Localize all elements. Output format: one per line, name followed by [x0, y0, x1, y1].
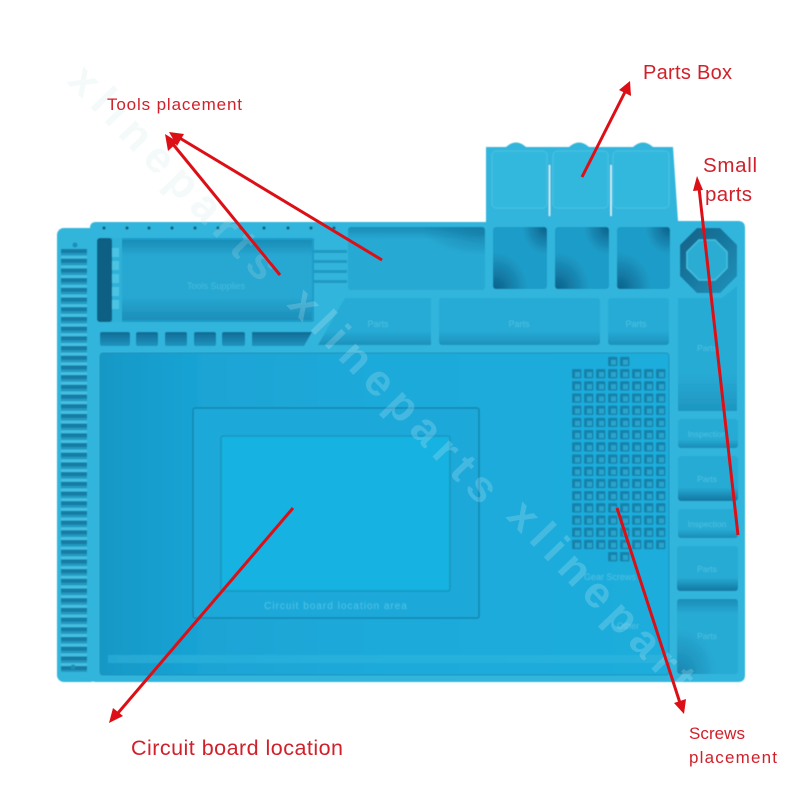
tools tray — [97, 238, 348, 322]
watermark: xlineparts — [59, 55, 289, 290]
label: screws placement: Screws — [689, 724, 745, 743]
octagon socket and right column: Inspection — [688, 519, 727, 529]
second row compartments: Parts — [367, 319, 389, 329]
octagon socket and right column: Inspection — [688, 429, 727, 439]
label: circuit board location: Circuit board location — [131, 736, 343, 760]
label: screws placement — [689, 724, 777, 767]
second row compartments — [318, 298, 669, 345]
watermark: xlineparts — [279, 278, 509, 513]
label: small parts: Small — [703, 154, 757, 177]
tools tray: Tools Supplies — [187, 281, 246, 291]
second row compartments: Parts — [625, 319, 647, 329]
label: small parts: parts — [705, 183, 752, 206]
arrow: tools placement 1 — [165, 134, 280, 275]
octagon socket and right column: Parts — [697, 631, 717, 641]
arrow: screws placement — [617, 508, 686, 714]
label: small parts — [703, 154, 757, 206]
arrow: small parts — [693, 176, 738, 535]
label: screws placement: placement — [689, 748, 777, 767]
three square parts wells — [493, 227, 670, 289]
octagon socket and right column: Parts — [697, 564, 717, 574]
main circuit board area: Circuit board location area — [264, 601, 408, 612]
large top compartment — [348, 227, 485, 290]
small tray slots — [100, 332, 312, 346]
watermark — [59, 55, 728, 725]
watermark: xlineparts — [498, 490, 728, 725]
main circuit board area — [100, 353, 669, 675]
second row compartments: Parts — [508, 319, 530, 329]
parts box lids — [492, 142, 669, 216]
arrow: tools placement 2 — [169, 132, 382, 260]
octagon socket and right column: Parts — [697, 474, 717, 484]
peg holes row — [102, 226, 336, 230]
screw grid — [571, 356, 667, 563]
left ladder strip — [57, 228, 97, 682]
octagon socket and right column: Parts — [697, 343, 717, 353]
main circuit board area: Other — [617, 621, 639, 631]
main mat surface — [90, 147, 745, 682]
label: parts box: Parts Box — [643, 62, 732, 84]
main circuit board area: Gear Screws — [584, 572, 637, 582]
arrow: parts box — [582, 81, 631, 177]
label: tools placement: Tools placement — [107, 95, 242, 114]
arrow: circuit board location — [109, 508, 293, 723]
panel: mat body — [57, 142, 745, 682]
octagon socket and right column — [677, 228, 738, 674]
